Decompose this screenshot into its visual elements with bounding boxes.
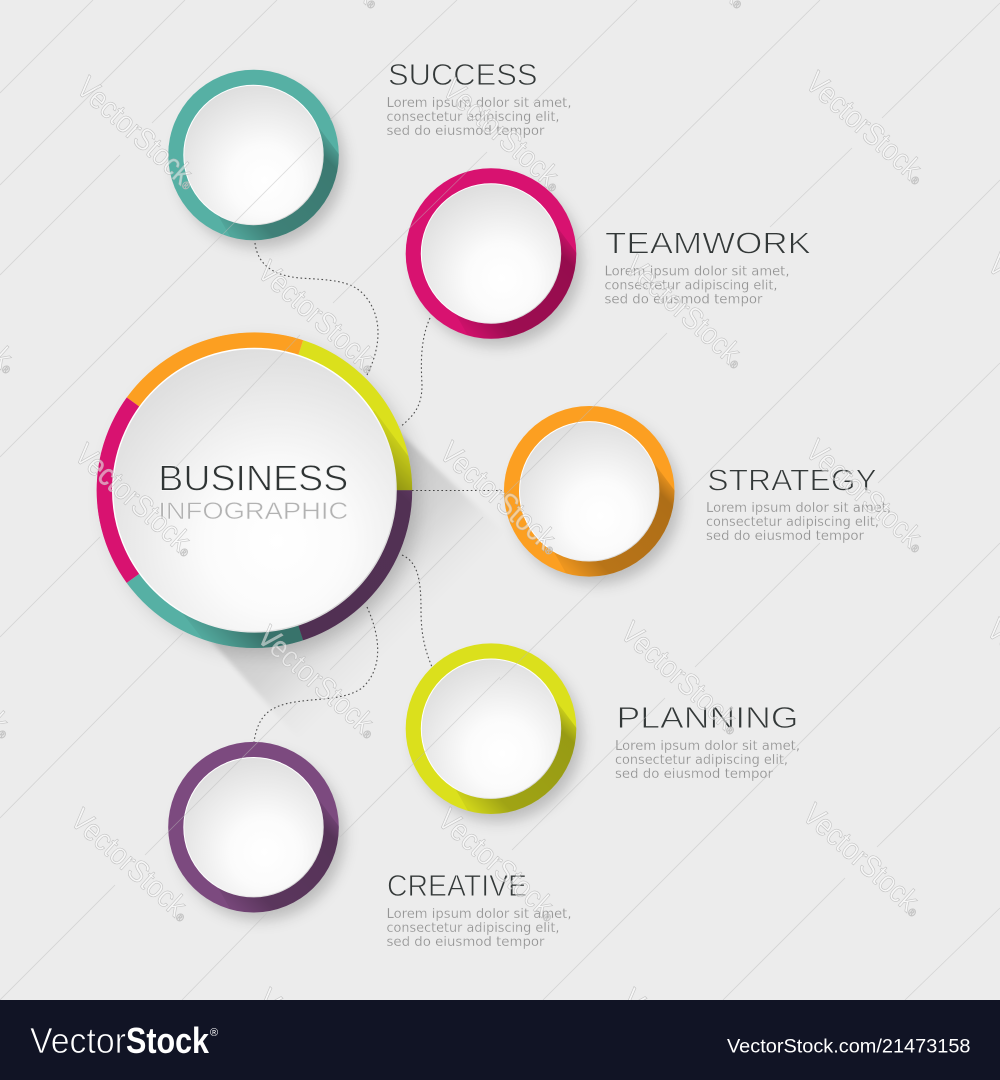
watermarks: VectorStock® [614,614,749,741]
central white disc [113,348,396,632]
long shadow of central circle [194,418,554,790]
text block: creative: sed do eiusmod tempor [386,935,545,950]
text block: strategy: Lorem ipsum dolor sit amet, [706,501,891,516]
watermarks: VectorStock® [433,434,568,561]
text block: planning: Lorem ipsum dolor sit amet, [615,739,800,754]
text block: teamwork: Lorem ipsum dolor sit amet, [604,264,790,279]
footer logo: Vector [30,1020,126,1061]
watermarks: VectorStock® [618,248,753,375]
text block: creative [386,868,572,950]
text block: creative: CREATIVE [387,868,527,903]
watermarks: VectorStock® [251,618,386,745]
watermarks: VectorStock® [436,71,571,198]
text block: teamwork: consectetur adipiscing elit, [604,278,778,293]
text block: planning: PLANNING [616,700,798,735]
text block: success: Lorem ipsum dolor sit amet, [386,96,572,111]
footer logo: ® [210,1027,218,1039]
watermarks: VectorStock® [799,64,934,191]
text block: success: SUCCESS [388,57,538,92]
text block: success [386,57,572,139]
text block: creative: consectetur adipiscing elit, [386,921,560,936]
watermarks: VectorStock® [251,253,386,380]
circle: creative [168,742,354,927]
watermarks: VectorStock® [796,796,931,923]
text block: teamwork: TEAMWORK [605,225,811,260]
dotted connectors [254,243,504,742]
segmented ring [96,332,412,648]
footer logo: Stock [126,1020,210,1061]
central circle: business infographic [96,332,476,710]
text block: creative: Lorem ipsum dolor sit amet, [386,907,572,922]
text block: teamwork [604,225,811,307]
watermarks: VectorStock® [64,801,199,928]
central subtitle: INFOGRAPHIC [158,498,348,525]
text block: strategy [706,463,891,544]
text block: planning [615,700,800,782]
text block: planning: sed do eiusmod tempor [615,767,774,782]
central title: BUSINESS [158,458,348,499]
central title [158,458,348,525]
footer image id: VectorStock.com/21473158 [727,1037,970,1058]
text block: strategy: sed do eiusmod tempor [706,529,865,544]
watermarks: VectorStock® [799,432,934,559]
text block: planning: consectetur adipiscing elit, [615,753,788,768]
circle: strategy [504,406,689,591]
text block: strategy: STRATEGY [707,463,877,498]
circle: planning [406,643,591,829]
circle: success [168,70,354,255]
circle: teamwork [406,168,591,354]
text block: success: consectetur adipiscing elit, [386,110,560,125]
footer bar [0,1000,1000,1080]
text block: success: sed do eiusmod tempor [386,124,545,139]
watermarks: VectorStock® [70,69,205,196]
watermarks: VectorStock® [431,801,566,928]
text block: strategy: consectetur adipiscing elit, [706,515,879,530]
soft shadow of central circle [106,342,418,654]
watermarks: VectorStock® [68,436,203,563]
text block: teamwork: sed do eiusmod tempor [604,292,763,307]
footer logo [30,1020,218,1061]
